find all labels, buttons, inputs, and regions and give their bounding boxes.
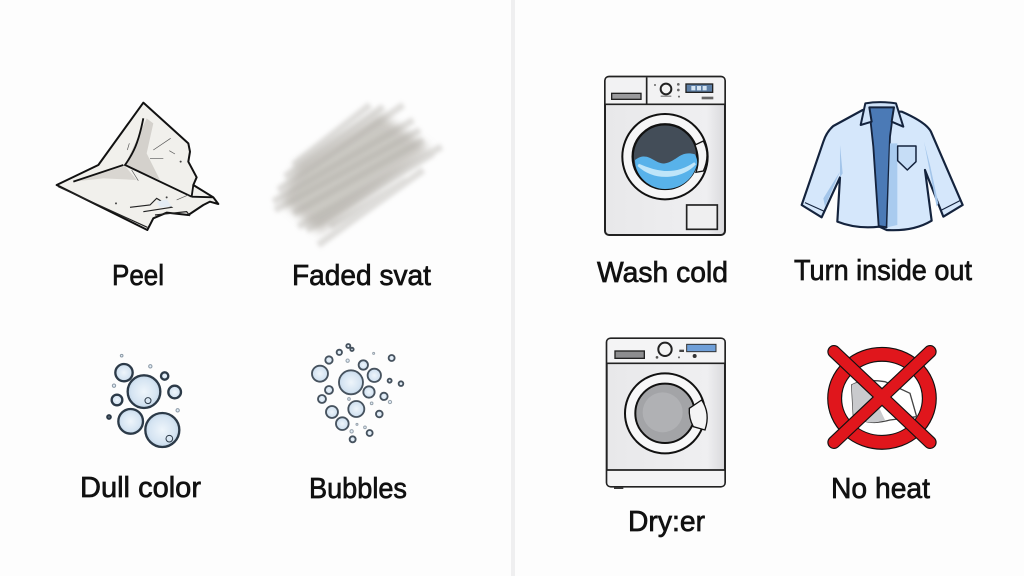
icon: dryer (607, 338, 725, 489)
label: Bubbles: Bubbles (309, 473, 407, 505)
icon: dull color bubbles (107, 354, 181, 447)
icon: faded swatch (273, 105, 442, 245)
label: Dryer: Dry:er (628, 506, 705, 538)
label: Dull color: Dull color (80, 472, 201, 504)
label: Peel: Peel (112, 260, 164, 292)
label: Faded svat: Faded svat (292, 260, 431, 292)
icon: no heat (834, 352, 930, 442)
panel: care steps (597, 77, 972, 538)
label: No heat: No heat (831, 473, 930, 505)
label: Wash cold: Wash cold (597, 257, 728, 289)
panel: problems (57, 103, 442, 505)
label: Turn inside out: Turn inside out (794, 255, 972, 287)
icon: bubbles (312, 344, 403, 442)
icon: shirt inside out (802, 102, 963, 230)
icon: washing machine (605, 77, 725, 235)
icon: peeling print (57, 103, 218, 230)
